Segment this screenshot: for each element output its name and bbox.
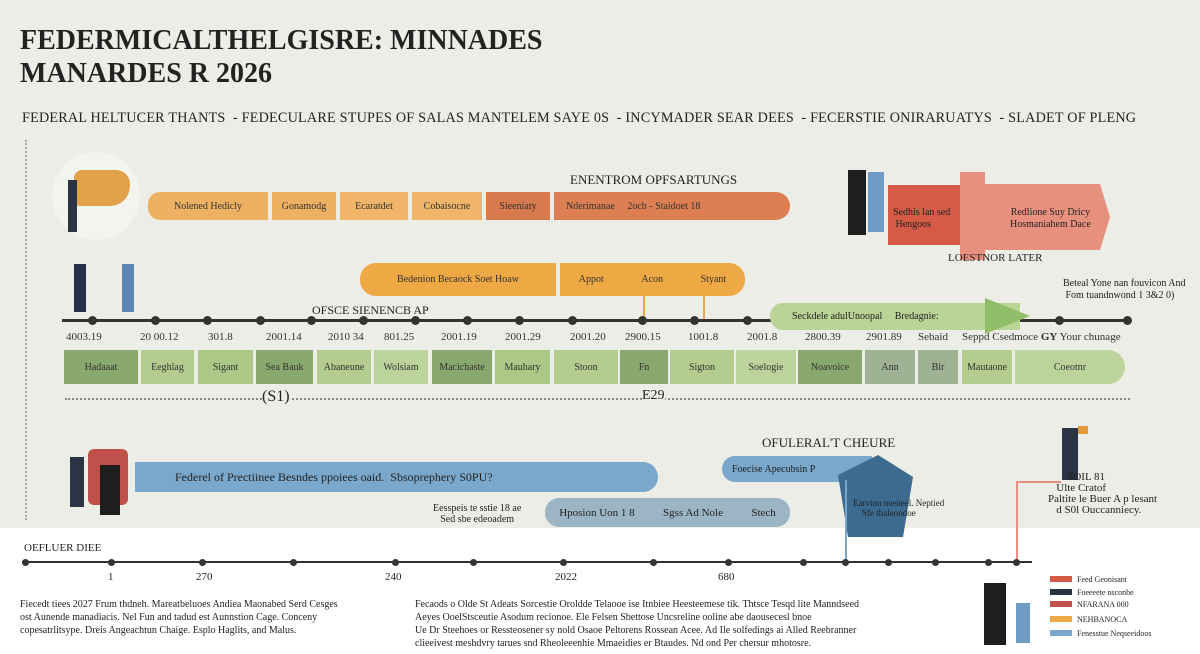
icon: person at desk (70, 449, 128, 515)
bottom timeline (22, 561, 1032, 563)
text: 1 (108, 571, 114, 583)
blue bar 2: Stech (751, 506, 776, 518)
text: d S0l Ouccanniecy. (1056, 504, 1141, 516)
blue bar 2 (545, 498, 790, 527)
legend: Fenesstue Neqseeidoos (1077, 629, 1151, 638)
text: Hosmaniahem Dace (1010, 219, 1091, 230)
title (20, 25, 542, 89)
orange bar: Sieeniaty (499, 200, 537, 212)
text: Sea Bauk (265, 362, 304, 372)
text: Noavoice (811, 362, 849, 372)
heading: blue section: OFULERAL'T CHEURE (762, 435, 895, 450)
text: Stoon (574, 362, 598, 372)
legend: NFARANA 000 (1077, 600, 1129, 609)
text: Eeghlag (151, 362, 184, 372)
text: Sfe thaleoodoe (862, 508, 916, 518)
text: 240 (385, 571, 402, 583)
text: (S1) (262, 388, 290, 405)
footer text left: Fiecedt tiees 2027 Frum thdneh. Mareatbeluoes Andiea Maonabed Serd Cesges (20, 599, 338, 610)
text: 2001.29 (505, 331, 541, 343)
text: Sebaid (918, 331, 948, 343)
text: Foecise Apecubsin P (732, 464, 815, 474)
text: 2001.19 (441, 331, 477, 343)
title: FEDERMICALTHELGISRE: MINNADES (20, 25, 542, 56)
text: 2001.8 (747, 331, 777, 343)
title: MANARDES R 2026 (20, 58, 272, 89)
dates (66, 331, 1121, 343)
text: Hadaaat (85, 362, 117, 372)
text: LOESTNOR LATER (948, 252, 1042, 264)
text: Sigton (689, 362, 715, 372)
text: 2900.15 (625, 331, 661, 343)
text: 2800.39 (805, 331, 841, 343)
legend: Foeeeete nsconbe (1077, 588, 1134, 597)
orange bar 2: Acon (641, 274, 663, 285)
text: Beteal Yone nan fouvicon And (1063, 278, 1186, 289)
orange bar: Ecaratdet (355, 200, 393, 212)
text: Ann (881, 362, 899, 372)
text: 20 00.12 (140, 331, 178, 343)
orange bar: Cobaisocne (424, 200, 470, 212)
text: Sedhis lan sed (893, 207, 950, 218)
legend (1050, 575, 1152, 638)
text: 2001.20 (570, 331, 606, 343)
text: 2010 34 (328, 331, 364, 343)
text: E29 (642, 388, 665, 403)
blue bar 2: Hposion Uon 1 8 (559, 506, 635, 518)
text: Mautaone (967, 362, 1007, 372)
dark blue arrow (838, 455, 913, 537)
blue bar (135, 462, 658, 492)
footer text middle (415, 599, 859, 649)
heading: timeline: OFSCE SIENENCB AP (312, 303, 429, 317)
footer text left: copesatrlitsype. Dreis Angeachtun Chaige. Esplo Haglits, and Malus. (20, 625, 296, 636)
green arrow (770, 303, 1020, 330)
subtitle: FEDERAL HELTUCER THANTS - FEDECULARE STUPES OF SALAS MANTELEM SAYE 0S - INCYMADER SEAR DEES - FECERSTIE ONIRARUATYS - SLADET OF PLENG (22, 110, 1136, 126)
text: 1001.8 (688, 331, 718, 343)
text: 301.8 (208, 331, 233, 343)
icon: people (74, 264, 134, 312)
text: Fom tuandnwond 1 3&2 0) (1066, 290, 1174, 301)
text: 801.25 (384, 331, 414, 343)
orange bar: Gonamodg (282, 200, 326, 212)
blue bar 2: Sgss Ad Nole (663, 506, 723, 518)
orange bar 2 (360, 263, 745, 296)
bottom white area (0, 528, 1200, 654)
people pair (848, 170, 884, 235)
text: Hengoos (896, 219, 931, 230)
green boxes (64, 350, 1125, 384)
footer text middle: Fecaods o Olde St Adeats Sorcestie Oroldde Telaooe ise Itnbiee Heesteemese tik. Thtsce Tesqd lite Manndseed (415, 599, 859, 610)
text: Eesspeis te sstie 18 ae (433, 503, 521, 514)
text: 680 (718, 571, 734, 583)
text: Paltite le Buer A p lesant (1048, 493, 1157, 505)
footer text middle: Aeyes OoelStsceutie Asodum recionoe. Ele Felsen Sbettose Uncsreline ooline abe daousecesl bnoe (415, 612, 812, 623)
text: 2901.89 (866, 331, 902, 343)
green arrow: Seckdele adulUnoopal Bredagnie: (792, 311, 939, 322)
icon: map circle (52, 152, 140, 240)
legend: NEHBANOCA (1077, 615, 1127, 624)
text: Abaneune (324, 362, 364, 372)
orange bar: Nderimanae 2ocb - Staidoet 18 (566, 200, 700, 212)
orange bar 2: Appot (579, 274, 604, 285)
icon: person with briefcase (1062, 426, 1088, 480)
text: 270 (196, 571, 212, 583)
text: Macichaste (439, 362, 485, 372)
salmon arrow (960, 172, 1110, 260)
orange bar (148, 192, 790, 220)
footer text left: ost Aunende manadiacis. Nel Fun and tadud est Aunnstion Cage. Conceny (20, 612, 317, 623)
text: Mauhary (504, 362, 541, 372)
text: Seppd Csedmoce GY Your chunage (962, 331, 1121, 343)
text: Sigant (213, 362, 238, 372)
text: Ulte Cratof (1056, 482, 1106, 494)
text: Bir (932, 362, 944, 372)
text: Soelogie (748, 362, 784, 372)
footer text middle: clieeivest meshdvry tarues snd Rheoleeenhie Mmaeidies er Btaudes. Nd ond Per chersur mhotosre. (415, 638, 811, 649)
text: SOIL 81 (1067, 471, 1105, 483)
orange bar: Nolened Hedicly (174, 200, 242, 212)
text: Coeotnr (1054, 362, 1086, 372)
text: Sed sbe edeoadem (440, 514, 514, 525)
timeline (62, 319, 1128, 322)
orange bar 2: Bedenion Becaock Soet Hoaw (397, 274, 519, 285)
text: Redlione Suy Dricy (1011, 207, 1090, 218)
red arrow (888, 185, 988, 245)
blue bar: Federel of Prectiinee Besndes ppoiees oaid. Sbsoprephery S0PU? (175, 470, 493, 484)
footer text left (20, 599, 338, 636)
heading: orange bar: ENENTROM OPFSARTUNGS (570, 172, 737, 187)
legend: Feed Geonisant (1077, 575, 1127, 584)
footer text middle: Ue Dr Steehoes or Ressteosener sy nold Osaoe Peltorens Rossean Acee. Ad Ile solfedings ai Alled Reebranner (415, 625, 856, 636)
text: Wolsiam (383, 362, 419, 372)
icon: family (984, 583, 1030, 645)
text: Fn (639, 362, 649, 372)
text: 2001.14 (266, 331, 302, 343)
orange bar 2: Styant (701, 274, 726, 285)
text: 4003.19 (66, 331, 102, 343)
text: Earvion mesteel. Neptied (853, 498, 944, 508)
text: OEFLUER DIEE (24, 542, 101, 554)
text: 2022 (555, 571, 577, 583)
